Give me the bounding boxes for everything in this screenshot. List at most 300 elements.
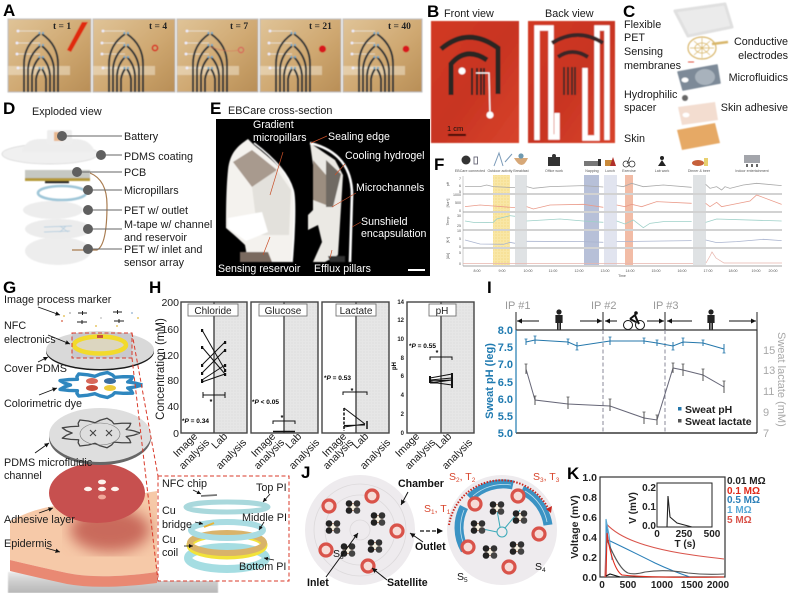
chart: glucose: *P < 0.05 [252,399,279,406]
x-axis labels: panel H: Image [320,431,349,460]
time axis: 9:00 [498,269,506,273]
y ticks: concentration: 80 [167,375,179,387]
x ticks [599,580,730,591]
y title: Voltage (mV) [569,495,581,559]
activity icons [462,153,760,167]
x-axis labels: panel H: Lab [350,431,371,452]
panel letter: D: D [3,99,15,118]
activity labels: Indoor entertainment [735,169,769,173]
phase arrows [517,320,756,322]
legend: 0.01 MΩ [727,476,766,487]
labels: panel D: and reservoir [124,232,187,244]
y-axis titles and ticks: 5 [459,251,461,255]
device disc: after flow [447,475,557,585]
x-axis labels: panel H: Image [393,431,422,460]
phase dividers [603,330,665,433]
chart: lactate: Lactate [340,306,373,317]
timeline chart: panel F: Temp [446,217,450,225]
white labels: encapsulation [361,228,426,240]
y ticks: 1.0 [582,472,597,484]
y-axis titles and ticks: 30 [457,214,461,218]
chart: pH: 14 [397,300,405,306]
red stage labels: panel J: , T [435,503,447,515]
right y ticks: 15 [763,345,775,357]
inset chart: 0.0 [642,521,656,532]
labels: panel C left: PET [624,32,645,44]
ribbon cable [72,173,107,250]
labels: panel C left: Skin [624,133,645,145]
x-axis labels: panel H: Lab [283,431,304,452]
photo: t = 1 with red dye arrow [8,19,91,92]
bottom PI ring [188,547,266,569]
chart: glucose: Glucose [265,306,302,317]
y-axis titles and ticks: 1000 [453,193,461,197]
chart: chloride: Chloride [194,306,232,317]
right y ticks: 11 [763,386,774,398]
middle PI ring [191,522,263,538]
labels: coil [162,547,178,559]
left y ticks: 8.0 [498,325,513,337]
white labels: micropillars [253,132,307,144]
x-axis labels: panel H: analysis [287,437,322,472]
series: sweat pH [524,336,726,353]
photo panel: EBCare cross-section [216,119,430,276]
series: sweat lactate [524,363,726,425]
chart: sweat pH and lactate [484,300,787,440]
heading: Back view: Back view [545,8,594,20]
labels: panel J [307,478,446,589]
chart: voltage decay [569,472,766,591]
x-axis labels: panel H: Image [249,431,278,460]
labels: panel J: Satellite [387,577,428,589]
labels: panel D: M-tape w/ channel [124,219,212,231]
labels: panel D: Micropillars [124,185,179,197]
y-axis titles and ticks [453,177,461,266]
legend [727,476,766,526]
left y ticks: 5.0 [498,428,513,440]
inset chart: T (s) [674,539,696,550]
activity labels: Office work [545,169,563,173]
stage labels: panel J: S [457,571,464,583]
callout lines [62,136,122,249]
chart: pH: * [436,350,439,357]
y ticks: concentration [161,297,179,440]
labels: bridge [162,519,192,531]
y-axis titles and ticks: 25 [457,224,461,228]
photo: t = 40 [343,19,422,92]
red stage labels: panel J: S [424,503,431,515]
legend: 5 MΩ [727,515,752,526]
phase labels: IP #1 [505,300,530,312]
x ticks: 0 [599,580,605,591]
y ticks: concentration: 120 [161,350,179,362]
labels: panel C right [721,36,789,114]
red dotted progress arrow [449,480,549,525]
x ticks: 2000 [707,580,730,591]
exploded device: panel D [2,130,122,265]
chart: pH: *P = 0.55 [409,343,436,350]
layer: skin [677,123,720,150]
chart: glucose: * [281,415,284,422]
labels: Cu [162,534,176,546]
x-axis labels: panel H [171,431,475,472]
labels: panel D: sensor array [124,257,185,269]
curves [605,519,724,577]
time axis: 8:00 [474,269,480,273]
time axis: 17:00 [704,269,712,273]
micropillar ring [38,186,86,200]
stage labels: panel J: 4 [542,567,546,574]
x-axis labels: panel H: Image [171,431,200,460]
x-axis labels: panel H: analysis [358,437,393,472]
left half shell [226,139,295,262]
y-axis titles and ticks: 10 [457,229,461,233]
legend: 0.1 MΩ [727,486,760,497]
chart: chloride: *P = 0.34 [182,418,209,425]
chart: pH: 12 [397,318,405,324]
panel letter: K: K [567,464,580,483]
panel letter: C: C [623,2,635,21]
layer: microfluidics [678,65,720,90]
x-axis labels: panel H: analysis [177,437,212,472]
photo: front view of patch [431,21,519,143]
chart: pH: pH [436,306,448,317]
photo: t = 7 [177,19,258,92]
scale label: 1 cm: 1 cm [447,124,463,133]
labels: panel G: Epidermis [4,538,53,550]
activity bands [493,175,706,266]
stage labels: panel J: 3 [340,554,344,561]
axes [516,330,757,433]
labels: panel D: Battery [124,131,159,143]
inset chart: 250 [676,529,693,540]
layer: skin adhesive [678,102,718,125]
panel letter: J: J [301,463,310,482]
red stage labels: panel J: , T [544,471,556,483]
labels: Cu [162,505,176,517]
PCB [25,170,90,183]
activity labels: Dinner & beer [688,169,711,173]
stage labels: panel J: S [535,561,542,573]
photo: t = 4 [93,19,175,92]
red stage labels: panel J: 1 [431,509,435,516]
red stage labels: panel J [424,471,560,516]
M-tape layer [25,219,91,239]
panel letter: E: E [210,99,221,118]
y ticks [582,472,597,584]
x-axis labels: panel H: analysis [252,437,287,472]
Cu coil [190,533,264,556]
y ticks: concentration: 160 [161,324,179,336]
labels: panel C left: Hydrophilic [624,89,678,101]
stage labels: panel J: 5 [464,577,468,584]
cover PDMS with NFC electronics [46,331,154,370]
x-axis labels: panel H: Lab [209,431,230,452]
left y ticks: 6.0 [498,394,513,406]
chart: pH: 6 [401,374,405,380]
labels: panel G: NFC [4,320,26,332]
right half section [308,143,352,262]
activity labels [455,169,769,173]
inset: NFC stack detail [158,476,289,581]
labels: panel G: PDMS microfluidic [4,457,93,469]
labels: panel C right: Conductive [734,36,788,48]
y-axis titles and ticks: 0 [459,209,461,213]
y ticks: 0.4 [582,532,597,544]
chart: pH [392,300,474,437]
labels: panel J: Outlet [415,541,446,553]
time axis: 14:00 [626,269,634,273]
activity labels: Napping [585,169,599,173]
y-axis titles and ticks: 0 [459,262,461,266]
exploded device: panel G [8,310,218,593]
battery [47,130,72,144]
labels [162,478,287,573]
labels: panel G: Image process marker [4,294,112,306]
labels: panel D: PDMS coating [124,151,193,163]
labels: panel C right: Microfluidics [729,72,789,84]
chart: pH: pH [392,362,398,370]
x-axis labels: panel H: analysis [403,437,438,472]
y-axis titles and ticks: 6 [459,184,461,188]
red dashed zoom outline [72,333,158,581]
heading: Front view: Front view [444,8,494,20]
white labels [218,119,426,275]
icon: standing person [555,309,563,330]
left y ticks: 7.0 [498,359,513,371]
photo: t = 4: t = 4 [149,22,167,32]
layer: hydrophilic spacer [682,95,688,101]
labels: panel C left: membranes [624,60,682,72]
right y ticks: 9 [763,407,769,419]
time axis: 19:00 [752,269,760,273]
inset chart: 0.1 [642,502,656,513]
activity labels: Lab work [655,169,669,173]
photo: back view of patch [528,21,615,143]
phase labels [505,300,678,312]
right y title: Sweat lactate (mM) [775,332,787,427]
photo: t = 21: t = 21 [309,22,332,32]
top PI ring [186,502,268,512]
legend [678,404,752,428]
PDMS coating [2,139,98,164]
activity labels: Outdoor activity [488,169,513,173]
heading: EBCare cross-section: EBCare cross-section [228,105,332,117]
photo: t = 21 [260,19,341,92]
time axis: 15:00 [652,269,660,273]
y ticks: concentration: 200 [161,297,179,309]
labels: panel J: Chamber [398,478,444,490]
activity labels: Exercise [622,169,636,173]
red stage labels: panel J: 3 [556,477,560,484]
legend: Sweat lactate [685,416,752,428]
device disc: before flow [305,475,415,585]
y-axis titles and ticks: 7 [459,177,461,181]
icon: cyclist [624,311,644,330]
panel letter: A: A [3,1,15,20]
legend: 0.5 MΩ [727,495,760,506]
timeline chart: panel F: [Ak] [446,253,450,259]
chart: chloride [181,302,247,433]
chart: lactate: *P = 0.53 [324,375,351,382]
labels: Bottom PI [239,561,286,573]
leader arrows [184,490,274,560]
time axis: 16:00 [678,269,686,273]
y-axis titles and ticks: 5 [459,237,461,241]
labels: panel C left: spacer [624,102,657,114]
x-axis labels: panel H: analysis [214,437,249,472]
white labels: Sunshield [361,216,408,228]
white labels: Cooling hydrogel [345,150,425,162]
scale bar [408,269,425,271]
leader arrows: panel J [326,492,423,580]
right y ticks [763,345,775,440]
sensing membrane [688,61,694,63]
white labels: Sealing edge [328,131,390,143]
phase labels: IP #2 [591,300,616,312]
chart: lactate: * [351,388,354,395]
flow arrow between discs [420,530,443,532]
y ticks: 0.0 [582,572,597,584]
epidermis [10,491,157,587]
inner channels [478,510,520,537]
x-axis labels: panel H: analysis [440,437,475,472]
stage labels: panel J: S [333,548,340,560]
labels: panel J: Inlet [307,577,329,589]
time axis: 12:00 [574,269,584,273]
photo: t = 7: t = 7 [230,22,248,32]
time axis: 18:00 [728,269,738,273]
left y ticks: 5.5 [498,411,513,423]
right y ticks: 7 [763,428,769,440]
labels: panel G: channel [4,470,42,482]
labels: panel G: electronics [4,334,56,346]
labels: panel C right: Skin adhesive [721,102,788,114]
labels: panel C left [624,19,682,145]
labels: panel D [124,131,212,269]
PET w/ outlet layer [23,201,83,219]
y ticks: concentration: 40 [167,401,179,413]
labels: panel G: Cover PDMS [4,363,67,375]
chart: chloride: * [210,399,213,406]
chart: pH: 10 [397,337,405,343]
panel letter: F: F [434,155,444,174]
chart: glucose [251,302,318,433]
left y ticks: 7.5 [498,342,513,354]
panel letter: G: G [3,278,16,297]
time axis: 20:00 [768,269,778,273]
red stage labels: panel J: , T [460,471,472,483]
legend: Sweat pH [685,404,732,416]
labels: NFC chip [162,478,207,490]
panel letter: I: I [487,278,492,297]
y ticks: 0.8 [582,492,597,504]
labels: Middle PI [242,512,287,524]
labels: panel G: Adhesive layer [4,514,75,526]
chart: pH: 2 [401,412,405,418]
floor shadow [8,572,218,593]
inset chart [628,483,721,550]
timeline chart: panel F: pH [446,181,450,186]
labels: panel D: PCB [124,167,146,179]
layer: conductive electrodes [688,37,728,59]
timeline chart: panel F: [K+] [446,237,450,243]
colorimetric dye [60,372,142,398]
photo: t = 1 with red dye arrow: t = 1 [53,22,71,32]
y ticks: 0.2 [582,552,597,564]
chart: pH: 0 [401,431,405,437]
image process markers [77,310,124,324]
exploded layers: panel C [675,4,732,150]
white labels: Gradient [253,119,294,131]
white labels: Sensing reservoir [218,263,301,275]
callout dots [57,131,106,254]
y-axis titles and ticks: 500 [455,201,461,205]
phase labels: IP #3 [653,300,678,312]
time axis: Time [618,274,626,278]
y ticks: 0.6 [582,512,597,524]
layer: flexible PET [675,4,732,36]
panel letter: B: B [427,2,439,21]
activity labels: Breakfast [513,169,529,173]
inset chart: 500 [704,529,721,540]
PDMS microfluidic channel [49,408,151,465]
Cu bridge [204,523,214,527]
white labels: Microchannels [356,182,424,194]
labels: panel D: PET w/ inlet and [124,244,202,256]
labels: panel G: Colorimetric dye [4,398,82,410]
y-axis titles and ticks: 0 [459,245,461,249]
x-axis labels: panel H: analysis [321,437,356,472]
legend: 1 MΩ [727,505,752,516]
photo: t = 40: t = 40 [388,22,411,32]
chart: lactate [322,302,389,433]
red leader lines [263,136,361,258]
timeline chart: panel F [446,153,782,278]
y-axis titles and ticks: 5 [459,190,461,194]
white labels: Efflux pillars [314,263,371,275]
x ticks: 1500 [681,580,704,591]
left y ticks [498,325,513,440]
activity labels: Lunch [605,169,615,173]
red stage labels: panel J: S [449,471,456,483]
chart: pH: 4 [401,393,405,399]
time axis: 13:00 [600,269,610,273]
labels: panel C right: electrodes [738,50,789,62]
y ticks: concentration: 0 [173,428,179,440]
red stage labels: panel J: S [533,471,540,483]
panel letter: H: H [149,278,161,297]
y-axis title: concentration: Concentration (mM) [155,318,167,420]
labels: panel C left: Flexible [624,19,661,31]
right y ticks: 13 [763,365,775,377]
NFC chip [201,495,217,496]
chart: pH: 8 [401,356,405,362]
leader arrows: panel G [35,307,70,552]
timeline chart: panel F: [Na+] [446,199,450,207]
icon: standing person [707,309,715,330]
filled blue chambers [459,484,548,550]
heading: Exploded view: Exploded view [32,106,102,118]
sensor traces [465,183,782,244]
adhesive layer [49,463,145,523]
panel A: time-lapse photo strip [8,19,422,92]
labels: panel C left: Sensing [624,46,663,58]
red stage labels: panel J: 2 [456,477,460,484]
x ticks: 1000 [651,580,674,591]
PET w/ inlet layer [25,237,91,265]
red stage labels: panel J: 3 [540,477,544,484]
